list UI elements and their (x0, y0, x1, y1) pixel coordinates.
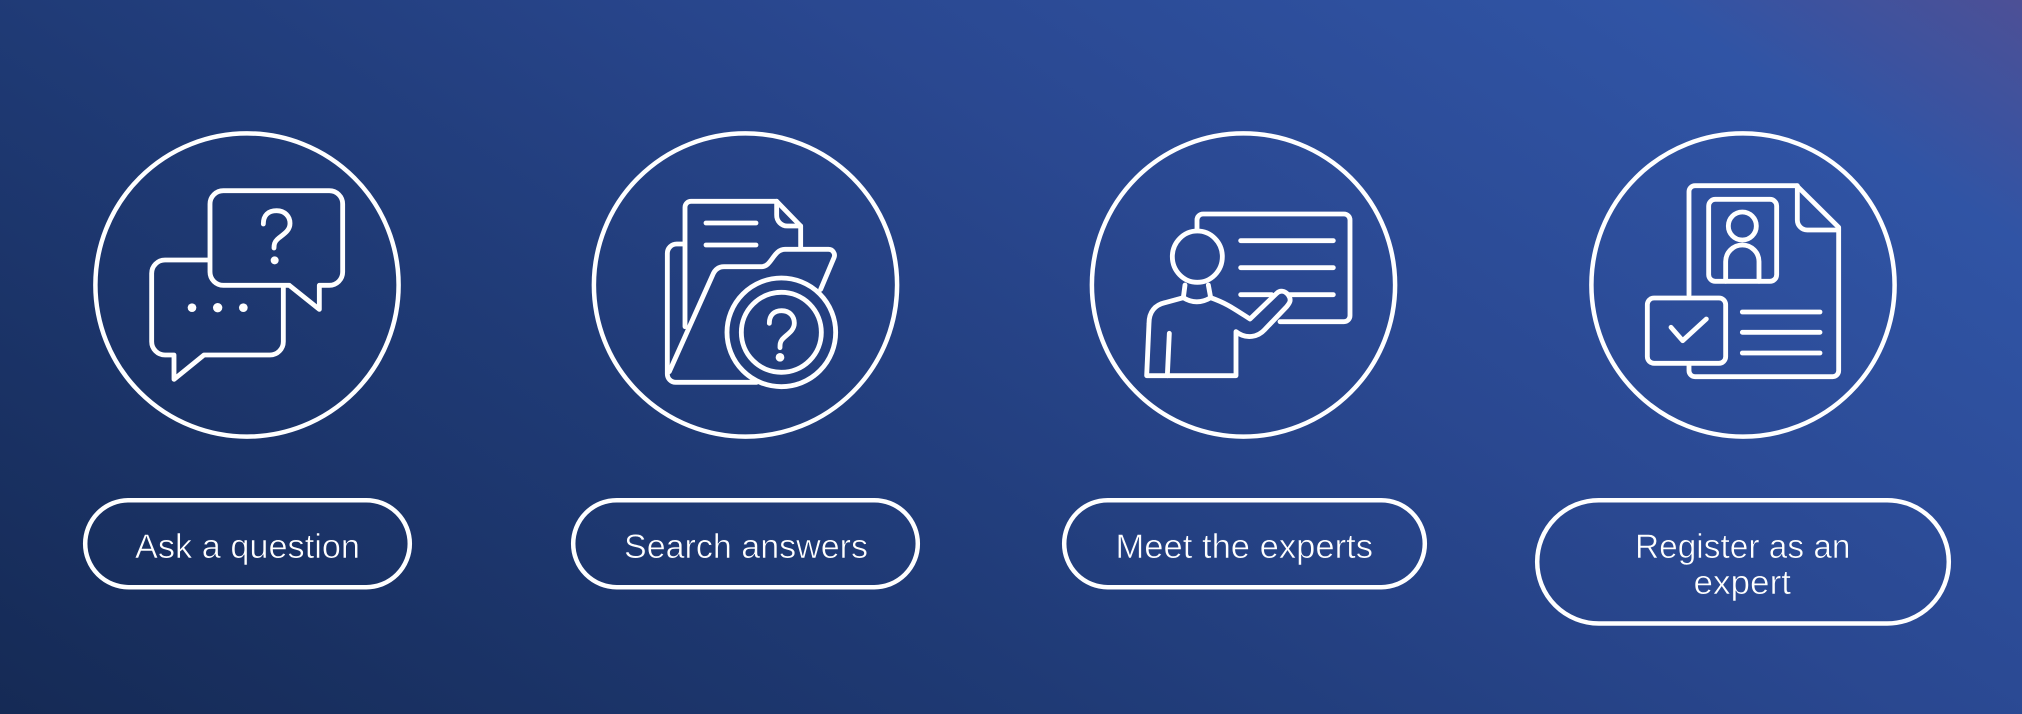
icon circle: search answers (594, 133, 897, 437)
icon circle: meet the experts (1092, 133, 1395, 437)
item: meet the experts (1064, 133, 1425, 587)
item: ask a question (85, 133, 410, 587)
item: register as an expert (1537, 133, 1949, 624)
button: ask a question: Ask a question (135, 528, 360, 566)
button: search answers (573, 500, 918, 587)
button: register as an expert: expert (1694, 564, 1792, 602)
icon circle: ask a question (95, 133, 399, 437)
icon circle: register as an expert (1591, 133, 1895, 437)
button: search answers: Search answers (624, 528, 868, 566)
icon: folder with documents and question lens (667, 201, 836, 387)
button: register as an expert: Register as an (1635, 528, 1850, 566)
button: meet the experts: Meet the experts (1116, 528, 1373, 566)
icon: speech bubbles with question mark (152, 191, 343, 379)
icon: profile document with check box (1647, 186, 1839, 377)
icon: presenter at a board (1147, 214, 1350, 376)
button: ask a question (85, 500, 410, 587)
item: search answers (573, 133, 918, 587)
button: meet the experts (1064, 500, 1425, 587)
button: register as an expert (1537, 500, 1949, 624)
